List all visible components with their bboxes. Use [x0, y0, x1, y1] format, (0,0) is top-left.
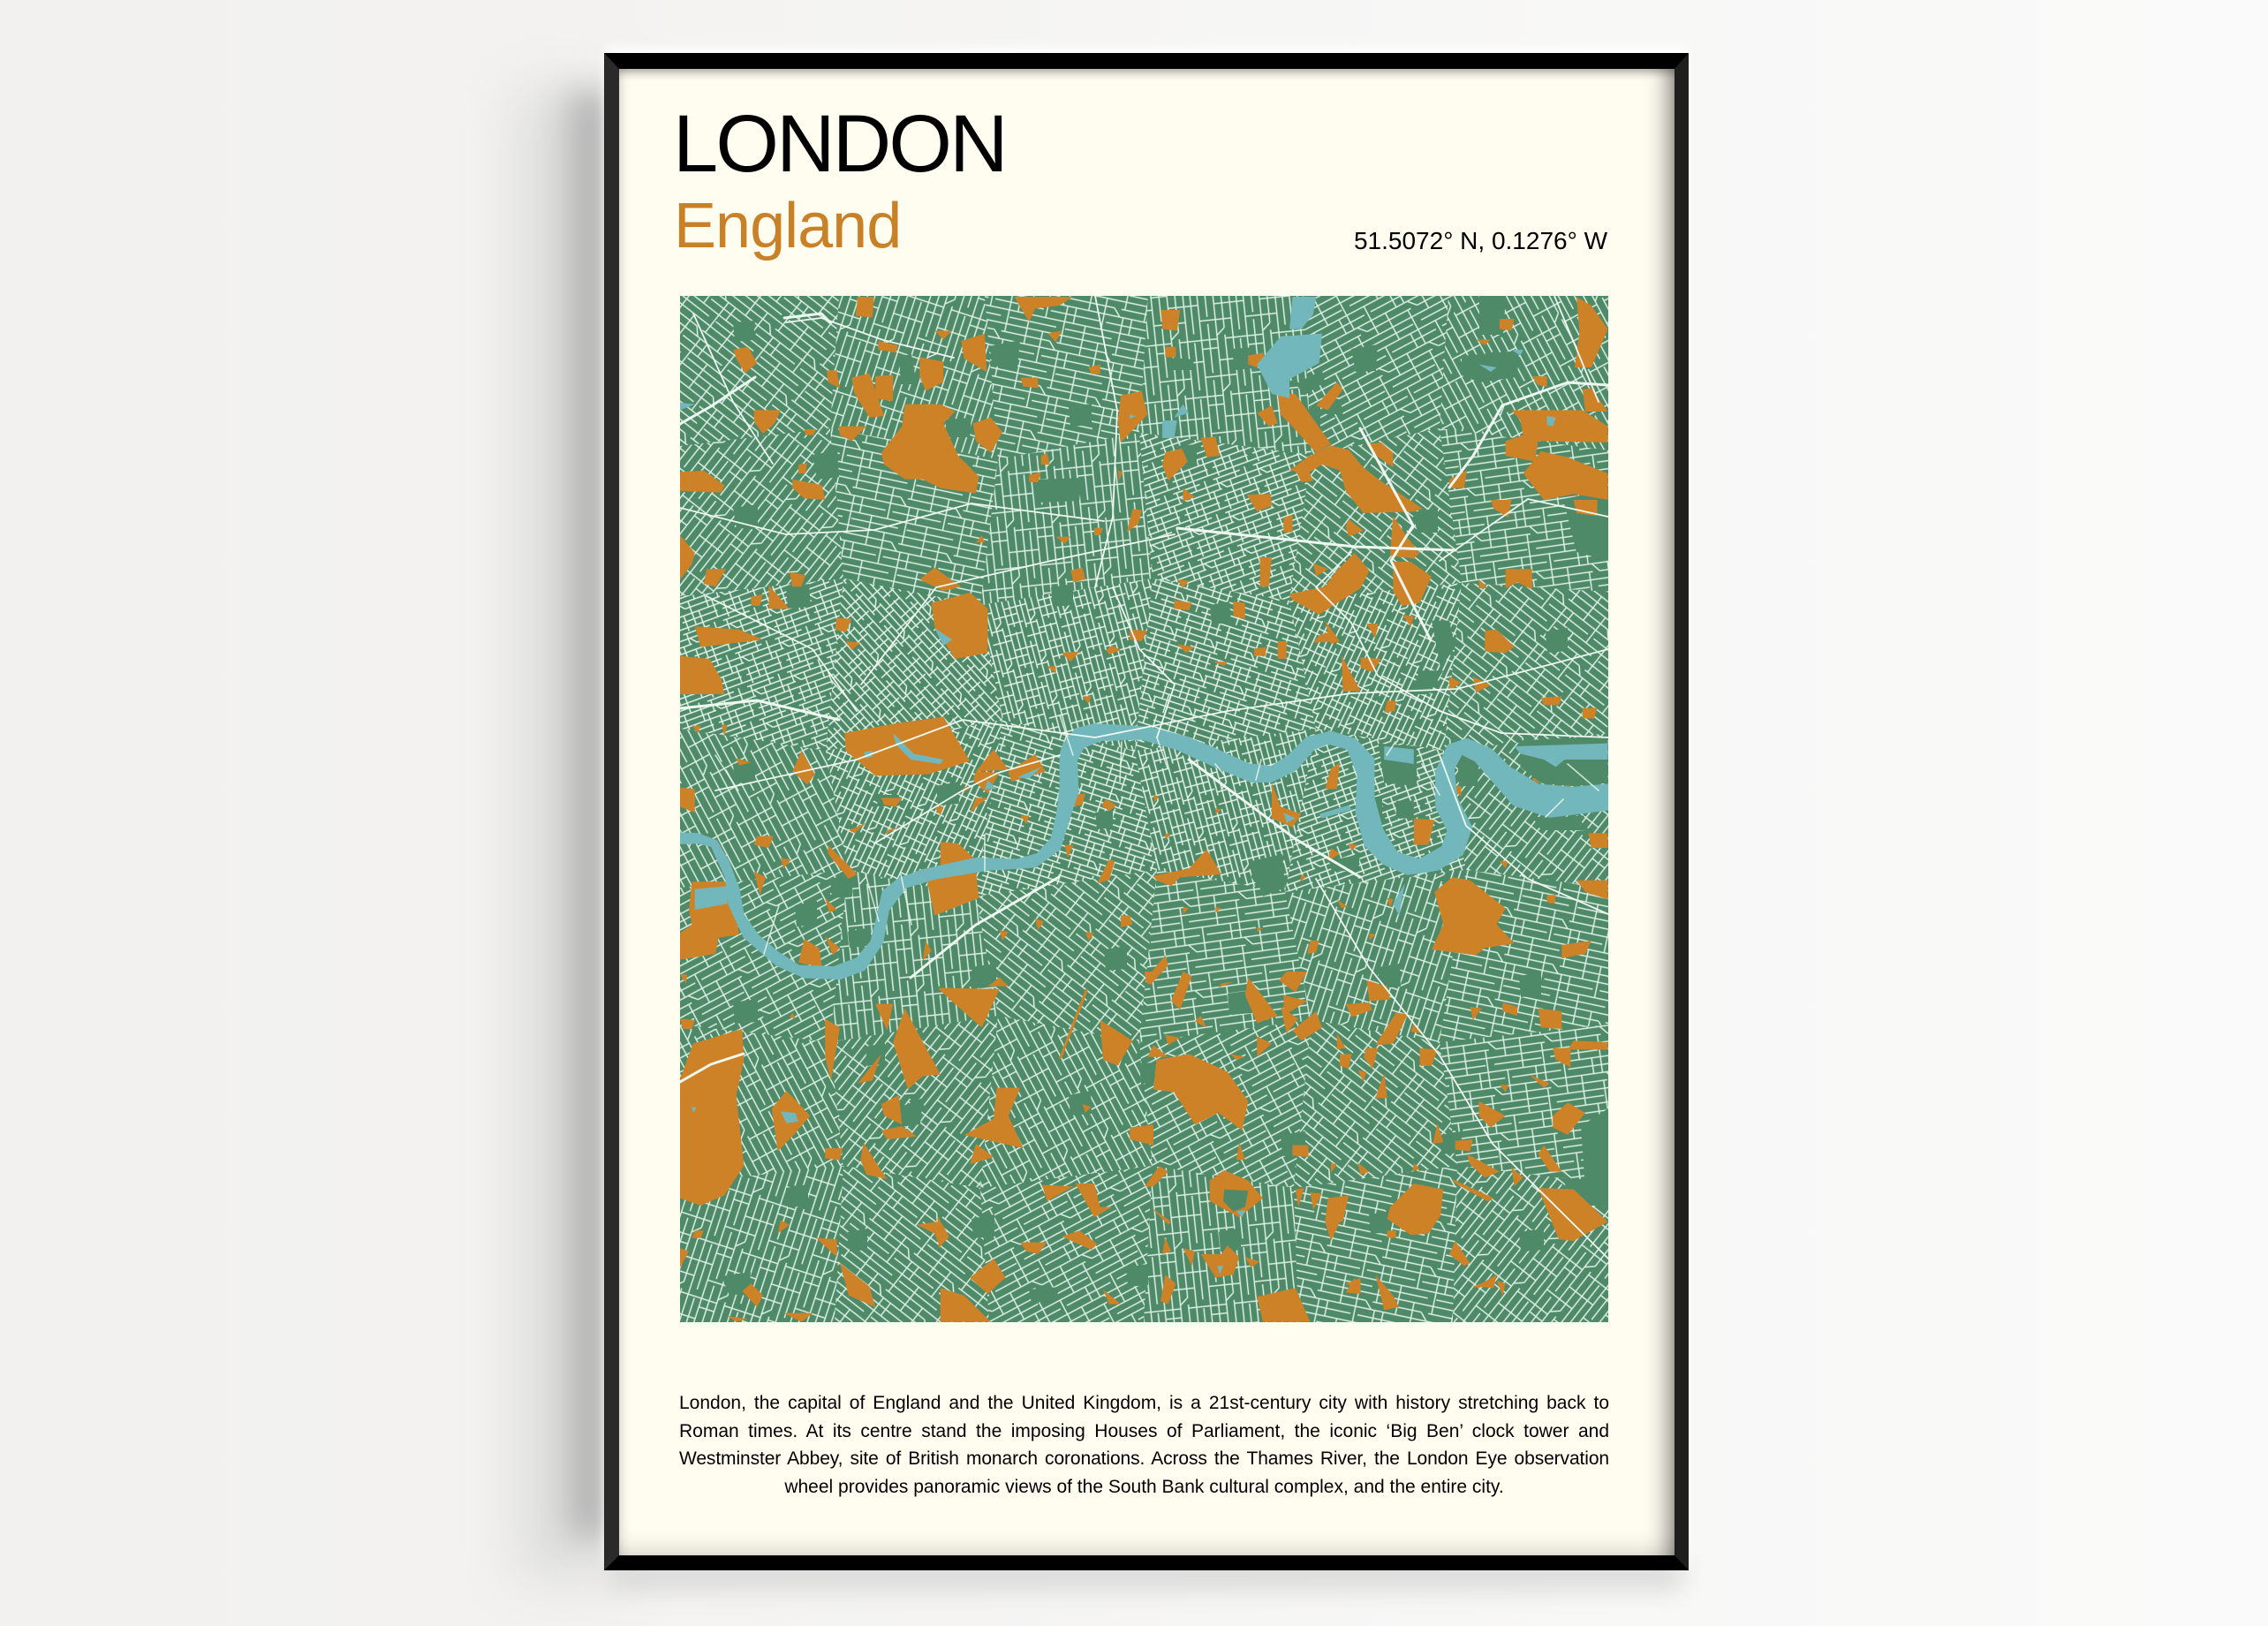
title: LONDON: LONDON [673, 99, 1006, 189]
description paragraph: wheel provides panoramic views of the South Bank cultural complex, and the entire city. [784, 1477, 1504, 1497]
wall shadow below frame [609, 1562, 1682, 1588]
subtitle: England: England [674, 191, 901, 261]
map base [680, 296, 1608, 1322]
dark green open land [722, 296, 1608, 1303]
Lakes and docks [695, 733, 1608, 916]
parks: central London [680, 696, 1608, 985]
River Thames [680, 726, 1608, 978]
street texture districts [680, 296, 1608, 1322]
map of London [680, 296, 1608, 1322]
description paragraph: Westminster Abbey, site of British monarch coronations. Across the Thames River, the London Eye observation [679, 1448, 1609, 1469]
parks: north London [680, 297, 1608, 694]
Reservoirs and ponds [680, 297, 1556, 694]
dark wall shadow left of frame [570, 93, 609, 1537]
parks: south London [680, 972, 1608, 1322]
Major roads [680, 296, 1608, 1259]
description paragraph: Roman times. At its centre stand the imposing Houses of Parliament, the iconic ‘Big Ben’ clock tower and [679, 1421, 1609, 1441]
paper inner shadow [619, 69, 1675, 1555]
description paragraph: London, the capital of England and the United Kingdom, is a 21st-century city with history stretching back to [679, 1393, 1609, 1413]
coordinates: 51.5072° N, 0.1276° W [1354, 227, 1607, 254]
description paragraph [679, 1393, 1609, 1497]
wide soft wall shadow [517, 88, 614, 1581]
poster frame [604, 53, 1689, 1570]
Park lakes and inner greens [692, 1107, 1248, 1274]
